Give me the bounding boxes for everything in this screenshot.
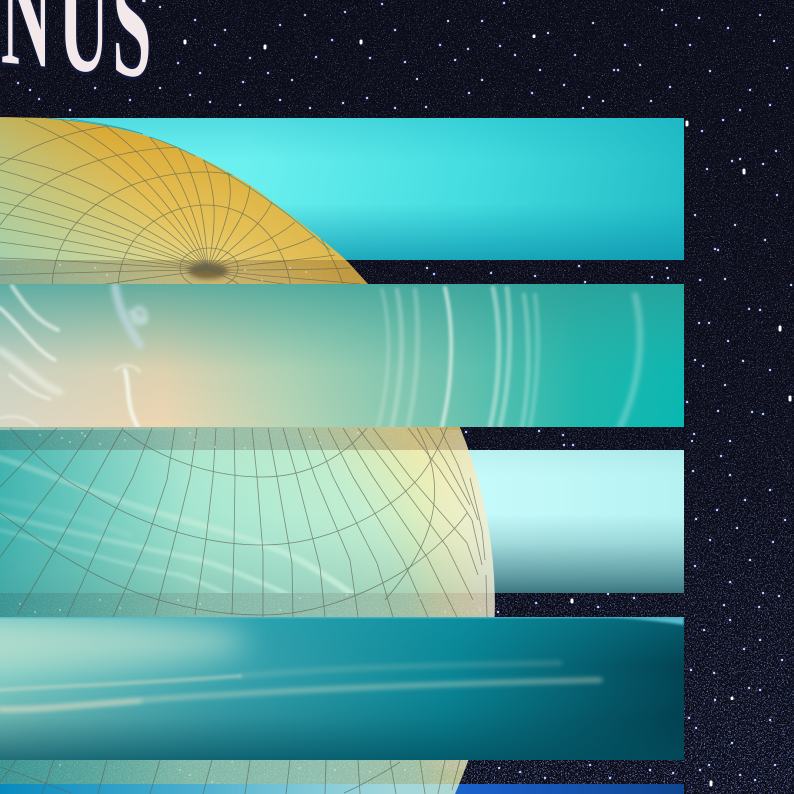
planet pole shadow	[188, 263, 228, 279]
planet grid: latitudes and meridians	[0, 119, 487, 794]
stars showing through planet in gaps	[20, 265, 480, 782]
wisps: white swirls	[0, 286, 640, 427]
grid overshoot at planet top edge	[45, 118, 330, 250]
planet upper cap over cyan strip	[0, 117, 346, 260]
planet lower band over blue strip	[0, 784, 470, 794]
cloud bands	[0, 663, 600, 710]
cloud highlight top-left	[0, 618, 250, 666]
panel: strip 5 blue	[0, 784, 684, 794]
top-right highlight	[610, 617, 684, 625]
panel: strip 2 teal and cream with wisps	[0, 284, 684, 427]
panel: strip 1 cyan	[0, 118, 684, 260]
planet: translucent yellow-to-teal sphere	[0, 110, 500, 794]
panel: strip 4 deep teal with cloud bands	[0, 617, 684, 760]
panel: strip 3 pale aqua	[0, 450, 684, 593]
